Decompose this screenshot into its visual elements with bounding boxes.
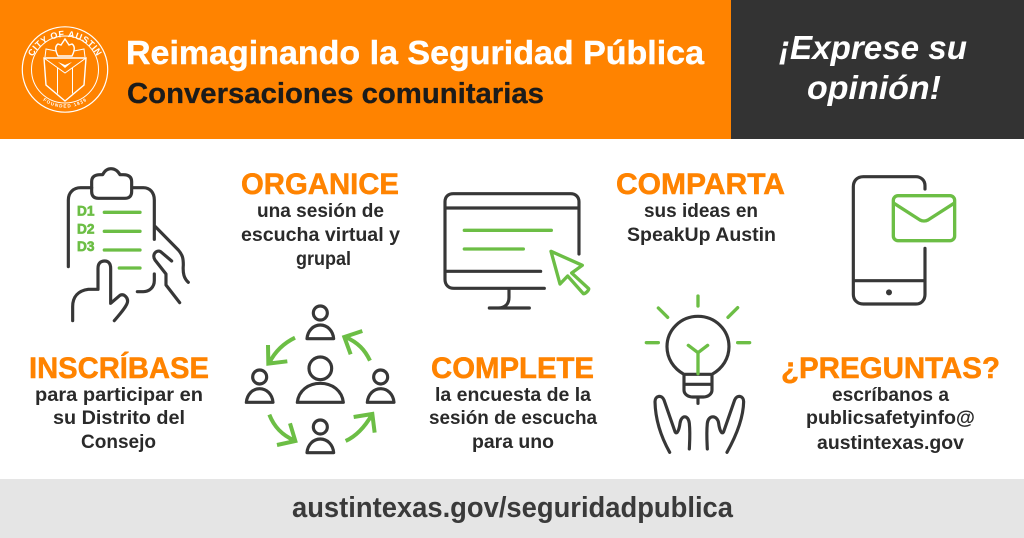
text: complete body: la encuesta de la [435,385,591,406]
icon: group of people with arrows [246,306,394,453]
heading: comparta: COMPARTA [616,168,785,201]
text: complete body: para uno [472,432,554,453]
header banner [0,0,731,139]
icon: computer with cursor [445,194,589,308]
panel: express your opinion: ¡Exprese su [779,29,967,66]
text: organice body: escucha virtual y [241,225,400,246]
icon: clipboard with districts and hands: D2 [77,221,95,236]
text: inscribase body: para participar en [35,385,203,406]
city seal [22,26,108,113]
text: organice body: grupal [296,249,351,270]
text: organice body: una sesión de [257,201,384,222]
text: comparta body: sus ideas en [644,201,758,222]
heading: inscribase: INSCRÍBASE [29,351,209,385]
text: inscribase body: su Distrito del [53,408,185,429]
text: preguntas body [806,385,975,454]
icon: light bulb and hands [646,296,750,452]
text: complete body: sesión de escucha [429,408,597,429]
panel: express your opinion: opinión! [807,69,941,106]
icon: clipboard with districts and hands [68,169,188,321]
icon: clipboard with districts and hands: D1 [77,204,95,219]
city seal: CITY OF AUSTIN [28,30,102,56]
footer bar with URL [0,479,1024,538]
text: preguntas body: escríbanos a [832,385,949,406]
heading: preguntas: ¿PREGUNTAS? [781,352,1000,385]
text: preguntas body: publicsafetyinfo@ [806,408,975,429]
icon: clipboard with districts and hands: D3 [77,239,95,254]
footer bar with URL: austintexas.gov/seguridadpublica [292,492,734,524]
text: preguntas body: austintexas.gov [817,433,964,454]
text: comparta body [627,201,776,246]
heading: complete: COMPLETE [431,352,594,385]
title: Reimaginando la Seguridad Pública [126,34,705,71]
text: organice body [241,201,400,270]
subtitle: Conversaciones comunitarias [127,78,544,110]
heading: organice: ORGANICE [241,168,399,201]
text: inscribase body: Consejo [81,432,156,453]
text: inscribase body [35,385,203,453]
city seal: FOUNDED 1839 [43,98,86,108]
text: complete body [429,385,597,453]
panel: express your opinion [731,0,1024,139]
icon: phone with envelope [853,177,955,304]
text: comparta body: SpeakUp Austin [627,225,776,246]
